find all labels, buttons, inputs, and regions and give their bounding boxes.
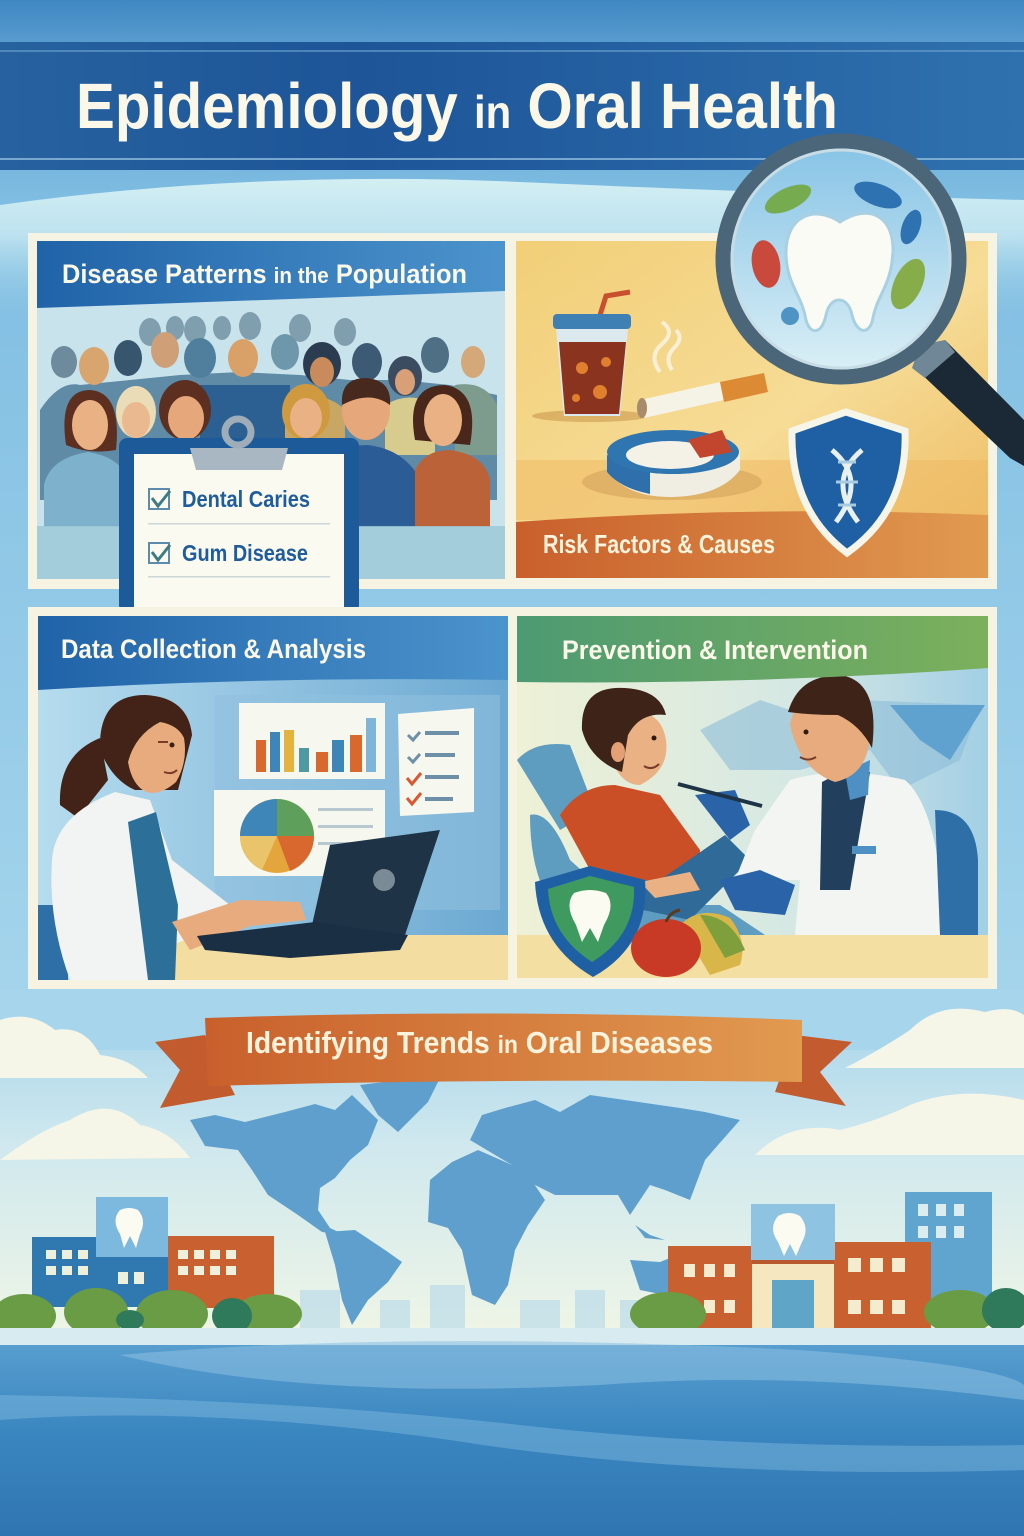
checklist item: dental caries [148, 486, 330, 524]
crowd illustration [40, 312, 497, 527]
patient [517, 688, 765, 935]
checklist item: gum disease: Gum Disease [182, 540, 308, 566]
panel: risk factors [506, 233, 997, 589]
left city [32, 1197, 274, 1308]
ribbon banner: Identifying Trends in Oral Diseases [246, 1025, 713, 1060]
icon: cigarette [637, 322, 768, 418]
icon: soda cup [532, 292, 648, 422]
heading: Disease Patterns in the Population [62, 259, 467, 289]
heading: Risk Factors & Causes [543, 529, 775, 559]
researcher [51, 695, 306, 980]
icon: mouth guard dish [582, 430, 762, 500]
laptop [197, 830, 440, 958]
magnifying glass [723, 141, 1024, 466]
icon: fruit [631, 910, 745, 977]
icon: tooth shield [535, 866, 645, 977]
icon: tooth [786, 213, 893, 331]
heading bar [37, 241, 505, 308]
checklist item: gum disease [148, 540, 330, 578]
bar chart card [239, 703, 385, 779]
footer waves [0, 1328, 1024, 1536]
ribbon banner [155, 1013, 852, 1108]
panel: prevention [517, 616, 988, 978]
heading: Data Collection & Analysis [61, 634, 366, 664]
heading bar [38, 616, 508, 690]
panel: disease patterns [28, 233, 514, 589]
right city [668, 1192, 992, 1328]
title: Epidemiology in Oral Health [76, 70, 838, 142]
continents [190, 1078, 740, 1325]
scene: world map [0, 990, 1024, 1338]
front people [44, 452, 119, 527]
pie chart card [214, 790, 385, 876]
faded skyline [300, 1285, 660, 1328]
checklist card [398, 708, 474, 816]
panel: data collection [28, 607, 997, 989]
icon: tooth sign right [751, 1204, 835, 1260]
icon: bacteria [748, 176, 932, 325]
heading: Prevention & Intervention [562, 635, 868, 665]
icon: DNA shield [792, 412, 905, 553]
dentist [678, 676, 978, 935]
heading bar [516, 511, 988, 578]
clouds [0, 1009, 1024, 1160]
header banner [0, 42, 1024, 170]
checklist item: dental caries: Dental Caries [182, 486, 310, 512]
clipboard [119, 419, 359, 613]
trees [0, 1288, 1024, 1338]
heading bar [517, 616, 988, 682]
icon: tooth sign left [96, 1197, 168, 1257]
